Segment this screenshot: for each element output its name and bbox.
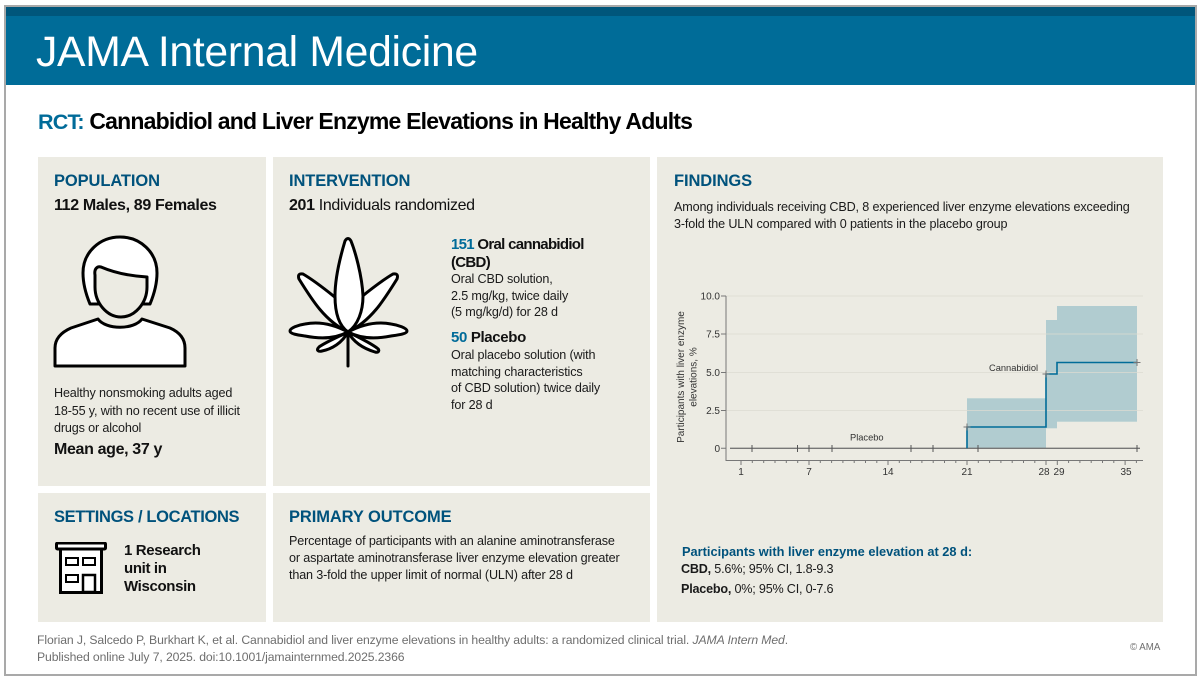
CBD arm description: (5 mg/kg/d) for 28 d [451, 305, 558, 319]
y axis labels: 10.0 [701, 292, 720, 302]
header banner [6, 7, 1195, 85]
confidence bands [967, 306, 1137, 448]
primary outcome text: than 3-fold the upper limit of normal (ULN) after 28 d [289, 568, 573, 582]
y axis labels: 5.0 [706, 368, 720, 379]
x axis labels: 7 [806, 467, 812, 478]
CBD arm [451, 236, 584, 319]
header top stripe [6, 7, 1195, 16]
intervention heading: INTERVENTION [289, 172, 410, 190]
chart: cumulative incidence of liver enzyme elevations [676, 292, 1143, 478]
settings text: 1 Research [124, 542, 201, 559]
cannabidiol line [967, 362, 1137, 448]
settings text: Wisconsin [124, 578, 196, 595]
x axis labels: 1 [738, 467, 744, 478]
censor marks [964, 359, 1140, 430]
y axis labels: 2.5 [706, 406, 720, 417]
y axis labels: 7.5 [706, 330, 720, 340]
x axis labels: 14 [882, 467, 894, 478]
population description [54, 386, 240, 435]
x axis labels: 29 [1053, 467, 1065, 478]
settings text: unit in [124, 560, 167, 577]
x axis labels: 21 [961, 467, 973, 478]
placebo arm title: 50 Placebo [451, 329, 526, 346]
title: RCT: Cannabidiol and Liver Enzyme Elevations in Healthy Adults [38, 108, 692, 134]
icon: person [54, 236, 186, 368]
placebo arm description: Oral placebo solution (with [451, 348, 595, 362]
CBD arm description: Oral CBD solution, [451, 272, 553, 286]
population count: 112 Males, 89 Females [54, 197, 217, 214]
y axis labels: 0 [714, 444, 720, 455]
panel: findings [657, 157, 1163, 622]
findings result summary [681, 544, 972, 596]
population description: Healthy nonsmoking adults aged [54, 386, 232, 400]
y axis title: Participants with liver enzyme [676, 311, 687, 443]
citation: Florian J, Salcedo P, Burkhart K, et al. Cannabidiol and liver enzyme elevations in healthy adults: a randomized clinical trial. JAMA Intern Med. [37, 633, 788, 647]
population description: 18-55 y, with no recent use of illicit [54, 404, 240, 418]
citation [37, 633, 788, 664]
panel: population [38, 157, 266, 486]
primary outcome text: or aspartate aminotransferase liver enzyme elevation greater [289, 551, 620, 565]
settings heading: SETTINGS / LOCATIONS [54, 508, 239, 526]
population description: drugs or alcohol [54, 421, 141, 435]
copyright: © AMA [1130, 642, 1160, 653]
findings summary: 3-fold the ULN compared with 0 patients in the placebo group [674, 217, 1007, 231]
CBD arm title [451, 236, 584, 271]
chart: cumulative incidence of liver enzyme elevations: elevations, % [688, 347, 700, 407]
x axis labels [738, 467, 1132, 478]
panel: primary outcome [273, 493, 650, 622]
randomized count: 201 Individuals randomized [289, 197, 475, 214]
icon: building [55, 542, 107, 594]
y axis labels [701, 292, 720, 455]
panel: intervention [273, 157, 650, 486]
axes [721, 296, 1143, 465]
population heading: POPULATION [54, 172, 160, 190]
x axis labels: 28 [1038, 467, 1050, 478]
series label: cannabidiol: Cannabidiol [989, 363, 1038, 373]
primary outcome heading: PRIMARY OUTCOME [289, 508, 452, 526]
findings summary: Among individuals receiving CBD, 8 experienced liver enzyme elevations exceeding [674, 200, 1130, 214]
placebo arm description [451, 348, 600, 412]
CBD arm description [451, 272, 568, 319]
placebo result: Placebo, 0%; 95% CI, 0-7.6 [681, 582, 833, 596]
CBD arm title: 151 Oral cannabidiol [451, 236, 584, 253]
placebo line [730, 445, 1140, 452]
CBD result: CBD, 5.6%; 95% CI, 1.8-9.3 [681, 562, 833, 576]
citation: Published online July 7, 2025. doi:10.1001/jamainternmed.2025.2366 [37, 650, 404, 664]
placebo arm [451, 329, 600, 412]
primary outcome text [289, 534, 620, 582]
placebo arm description: matching characteristics [451, 365, 582, 379]
mean age: Mean age, 37 y [54, 441, 162, 458]
findings summary [674, 200, 1130, 231]
placebo arm description: of CBD solution) twice daily [451, 381, 600, 395]
result heading: Participants with liver enzyme elevation at 28 d: [682, 544, 972, 559]
CBD arm title: (CBD) [451, 254, 490, 271]
placebo arm description: for 28 d [451, 398, 493, 412]
primary outcome text: Percentage of participants with an alanine aminotransferase [289, 534, 615, 548]
journal name: JAMA Internal Medicine [36, 28, 478, 76]
icon: cannabis leaf [288, 237, 408, 368]
series label: placebo: Placebo [850, 432, 884, 442]
panel: settings / locations [38, 493, 266, 622]
settings text [124, 542, 201, 595]
findings heading: FINDINGS [674, 172, 752, 190]
x axis labels: 35 [1120, 467, 1132, 478]
CBD arm description: 2.5 mg/kg, twice daily [451, 289, 568, 303]
